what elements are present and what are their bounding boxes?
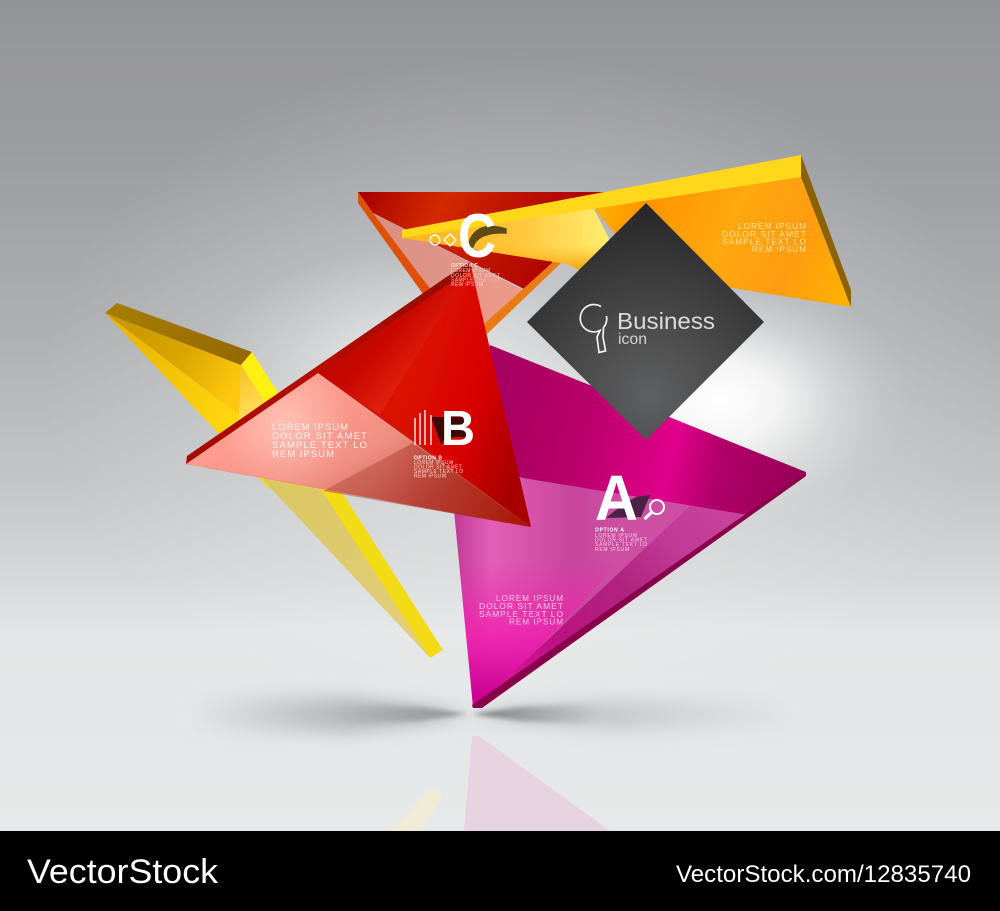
option C text: LOREM IPSUM: [451, 268, 490, 274]
C right edge: [483, 262, 562, 334]
B top face left: [318, 267, 471, 415]
orange panel text: [722, 221, 807, 254]
option B text: REM IPSUM: [414, 474, 446, 480]
panel: orange triangle: [402, 155, 851, 307]
reflection: magenta triangle: [464, 736, 610, 831]
yellow face: [105, 313, 430, 658]
orange panel text: DOLOR SIT AMET: [722, 229, 807, 239]
footer brand: VectorStock: [27, 853, 219, 891]
B panel text: DOLOR SIT AMET: [272, 431, 368, 441]
yellow triangle: [105, 303, 443, 658]
A panel text: DOLOR SIT AMET: [479, 601, 564, 611]
option A text: [595, 528, 647, 553]
C left edge: [358, 192, 431, 294]
panel C: red triangle: [358, 192, 605, 334]
icon: magnifier outline: [580, 305, 607, 352]
B top face right: [380, 267, 531, 527]
reflection: yellow bar: [391, 787, 444, 831]
A panel text: REM IPSUM: [509, 616, 564, 626]
yellow top bevel: [105, 303, 252, 365]
icon: magnifier: [644, 500, 664, 519]
C pink face: [373, 213, 523, 324]
option B text: LOREM IPSUM: [414, 460, 453, 466]
B pink face: [186, 373, 531, 527]
A panel text: LOREM IPSUM: [496, 593, 564, 603]
option A text: SAMPLE TEXT LO: [595, 542, 647, 548]
panel A: magenta triangle: [450, 345, 806, 708]
orange right face: [593, 177, 851, 307]
footer bar: [0, 831, 1000, 911]
option C text: [451, 263, 500, 288]
A panel text: [479, 593, 564, 626]
B panel text: LOREM IPSUM: [272, 422, 349, 432]
floor shadow: [190, 698, 800, 732]
panel: business diamond: [527, 203, 764, 440]
B panel text: SAMPLE TEXT LO: [272, 440, 368, 450]
option A text: OPTION A: [595, 528, 624, 534]
option A text: LOREM IPSUM: [595, 533, 637, 539]
icon: bars: [415, 410, 431, 445]
letter A shadow: [606, 495, 650, 518]
panel B: red triangle: [186, 262, 531, 527]
option A text: DOLOR SIT AMET: [595, 538, 647, 544]
A top face: [470, 345, 806, 515]
option C text: OPTION C: [451, 263, 478, 269]
footer url: VectorStock.com/12835740: [676, 861, 971, 888]
option B text: DOLOR SIT AMET: [414, 464, 462, 470]
A bevel: [472, 472, 806, 708]
B panel text: [272, 422, 368, 459]
orange top bevel: [402, 155, 801, 238]
orange left face: [402, 207, 640, 300]
orange panel text: REM IPSUM: [752, 244, 807, 254]
B panel text: REM IPSUM: [272, 449, 335, 459]
option C text: DOLOR SIT AMET: [451, 273, 500, 279]
A fold: [478, 506, 747, 705]
A panel text: SAMPLE TEXT LO: [479, 609, 564, 619]
diamond: [527, 203, 764, 440]
option B text: [414, 456, 463, 480]
letter B shadow: [431, 417, 467, 444]
orange side bevel: [801, 155, 851, 307]
icon label: icon: [618, 331, 647, 348]
letter A: A: [595, 462, 638, 534]
option B text: SAMPLE TEXT LO: [414, 469, 463, 475]
B bevel: [186, 262, 472, 464]
icon: circle and diamond: [430, 234, 456, 246]
yellow side bar: [241, 352, 443, 658]
option C text: SAMPLE TEXT LO: [451, 278, 499, 284]
letter C: C: [458, 202, 496, 271]
option C text: REM IPSUM: [451, 282, 483, 288]
A lower face: [450, 470, 747, 706]
Business label: Business: [617, 308, 715, 334]
B underlay: [186, 267, 531, 527]
letter C shadow: [468, 227, 506, 247]
option A text: REM IPSUM: [595, 547, 629, 553]
orange panel text: LOREM IPSUM: [738, 221, 807, 231]
B fold: [323, 443, 531, 527]
panel C label group: [430, 202, 506, 288]
letter B: B: [441, 402, 475, 456]
option B text: OPTION B: [414, 456, 442, 462]
orange panel text: SAMPLE TEXT LO: [722, 236, 807, 246]
C top face: [358, 192, 605, 292]
